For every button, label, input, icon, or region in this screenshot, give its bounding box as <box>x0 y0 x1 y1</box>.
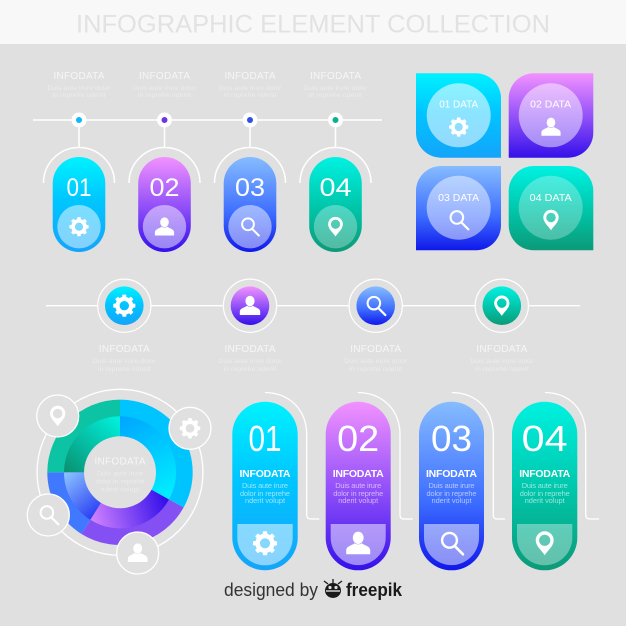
card 04 <box>512 392 599 570</box>
step 04 capsule: in reprehe ndenit <box>309 92 362 99</box>
card 01: 01 <box>248 418 282 459</box>
footer credit: designed by <box>224 580 318 600</box>
step 02 capsule: 02 <box>150 174 180 202</box>
donut icon: gear <box>169 407 211 449</box>
donut chart: dolor in reprehe <box>96 478 145 486</box>
card 01: INFODATA <box>240 468 291 480</box>
icon: freepik logo <box>324 579 342 598</box>
card 04: nderit volupt <box>525 496 565 505</box>
card 04: dolor in reprehe <box>520 489 570 498</box>
card 03: INFODATA <box>426 468 477 480</box>
step 03 capsule: in reprehe ndenit <box>224 92 277 99</box>
step 01 capsule: 01 <box>66 174 92 202</box>
card 01 <box>232 392 319 570</box>
tile 02 data: 02 DATA <box>530 100 572 110</box>
step 02 capsule: in reprehe ndenit <box>138 92 191 99</box>
tile 03 data <box>416 166 501 250</box>
tile 03 data: 03 DATA <box>438 193 480 204</box>
donut chart: INFODATA <box>94 456 146 468</box>
panel: horizontal timeline with round icons <box>46 279 580 373</box>
node 2 user: INFODATA <box>224 344 276 355</box>
tile 01 data: 01 DATA <box>439 100 479 110</box>
step 02 capsule: Duis aute irure dolor <box>133 85 197 92</box>
node 4 pin: Duis aute irure dolor <box>470 358 534 365</box>
step 02 capsule <box>129 71 200 252</box>
node 4 pin: INFODATA <box>476 344 528 355</box>
donut chart: nderit volupt <box>100 486 140 494</box>
step 01 capsule: Duis aute irure dolor <box>48 85 111 92</box>
node 3 search <box>344 279 408 373</box>
step 03 capsule: 03 <box>235 174 265 202</box>
donut icon: user <box>117 532 159 574</box>
node 3 search: in reprehe ndenit <box>349 366 402 373</box>
card 03: Duis aute irure <box>428 481 474 490</box>
card 03: 03 <box>431 418 472 459</box>
donut chart <box>27 389 211 574</box>
step 03 capsule: Duis aute irure dolor <box>218 85 282 92</box>
node 2 user: Duis aute irure dolor <box>218 358 282 365</box>
donut icon: search <box>27 494 69 536</box>
card 03: nderit volupt <box>432 496 472 505</box>
step 01 capsule <box>44 71 114 252</box>
step 04 capsule: Duis aute irure dolor <box>304 85 368 92</box>
node 2 user <box>218 279 282 373</box>
step 02 capsule: INFODATA <box>139 71 190 82</box>
footer credit <box>224 579 403 600</box>
step 04 capsule: 04 <box>320 174 352 202</box>
panel: four data tiles <box>416 73 593 250</box>
card 02: 02 <box>337 418 379 459</box>
node 4 pin <box>470 279 534 373</box>
step 04 capsule: INFODATA <box>310 71 361 82</box>
node 1 gear: INFODATA <box>99 344 150 355</box>
node 3 search: Duis aute irure dolor <box>344 358 408 365</box>
footer credit: freepik <box>346 580 403 600</box>
card 02: dolor in reprehe <box>333 489 383 498</box>
card 04: 04 <box>522 418 568 459</box>
tile 04 data: 04 DATA <box>530 193 572 204</box>
card 01: nderit volupt <box>245 496 285 505</box>
title banner: INFOGRAPHIC ELEMENT COLLECTION <box>76 12 550 39</box>
donut icon: pin <box>37 395 79 437</box>
step 04 capsule <box>300 71 371 252</box>
donut chart: Duis aute irure <box>97 470 143 478</box>
tile 01 data <box>416 73 501 158</box>
step 01 capsule: in reprehe ndenit <box>52 92 106 99</box>
node 1 gear <box>93 279 157 373</box>
step 03 capsule: INFODATA <box>224 71 276 82</box>
node 3 search: INFODATA <box>350 344 402 355</box>
card 03 <box>419 392 505 570</box>
card 02 <box>326 392 413 570</box>
step 01 capsule: INFODATA <box>54 71 105 82</box>
tile 04 data <box>509 166 593 250</box>
card 02: Duis aute irure <box>335 481 381 490</box>
card 04: Duis aute irure <box>522 481 568 490</box>
panel: tall cards <box>232 392 599 570</box>
step 03 capsule <box>214 71 286 252</box>
card 01: dolor in reprehe <box>240 489 290 498</box>
card 02: nderit volupt <box>338 496 378 505</box>
node 2 user: in reprehe ndenit <box>224 366 277 373</box>
node 1 gear: Duis aute irure dolor <box>93 358 157 365</box>
panel: timeline with capsule steps <box>33 71 382 252</box>
node 1 gear: in reprehe ndenit <box>98 366 151 373</box>
tile 02 data <box>509 73 593 158</box>
card 04: INFODATA <box>519 468 571 480</box>
card 02: INFODATA <box>333 468 384 480</box>
card 01: Duis aute irure <box>242 481 288 490</box>
node 4 pin: in reprehe ndenit <box>475 366 528 373</box>
card 03: dolor in reprehe <box>426 489 476 498</box>
title banner <box>0 0 626 44</box>
